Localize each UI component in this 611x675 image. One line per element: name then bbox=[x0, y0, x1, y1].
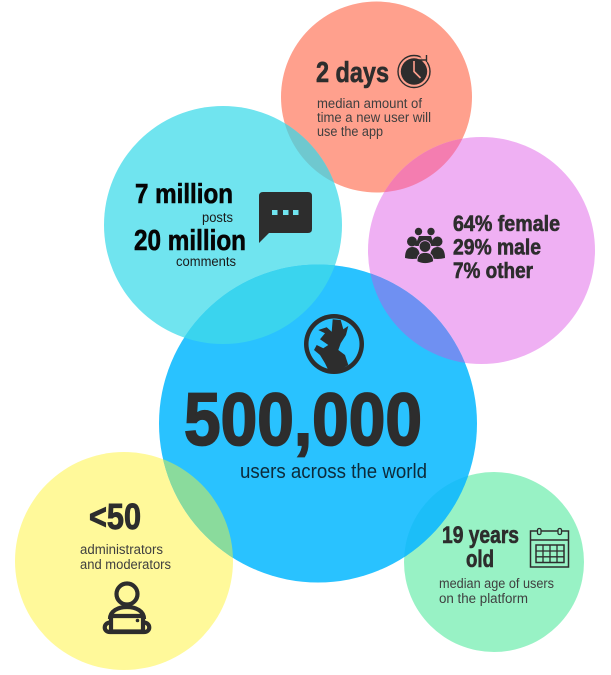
description: median time: median amount of bbox=[317, 96, 422, 111]
circle: yellow staff panel bbox=[15, 452, 233, 670]
label: administrators and moderators: administrators bbox=[80, 542, 163, 557]
label: comments: comments bbox=[176, 254, 236, 269]
stat: under 50: <50 bbox=[89, 496, 141, 537]
circle: pink demographics panel bbox=[368, 137, 595, 364]
text block: median age: median age of users bbox=[439, 576, 554, 591]
heading: 2 days: 2 days bbox=[316, 57, 389, 89]
icon: clock bbox=[398, 55, 430, 88]
overlap: blue and yellow bbox=[163, 459, 233, 558]
description: median time: use the app bbox=[317, 124, 383, 139]
text block: 2 days bbox=[316, 57, 431, 139]
text block: gender split: 64% female bbox=[453, 211, 560, 236]
stat: 20 million: 20 million bbox=[134, 225, 246, 257]
text block: median age: on the platform bbox=[439, 591, 528, 606]
label: posts: posts bbox=[202, 210, 233, 225]
label: administrators and moderators: and moderators bbox=[80, 557, 171, 572]
overlap: red and pink bbox=[384, 138, 462, 192]
text block: median age bbox=[439, 522, 554, 606]
overlap: blue and cyan bbox=[184, 264, 335, 344]
overlap: red and cyan bbox=[284, 123, 334, 182]
description: median time bbox=[317, 96, 431, 139]
icon: globe bbox=[304, 314, 364, 374]
overlap: blue and green bbox=[404, 476, 468, 558]
icon: person at laptop bbox=[105, 584, 149, 632]
overlap: blue and pink bbox=[370, 274, 465, 363]
icon: chat bubble bbox=[259, 192, 312, 243]
text block: gender split: 7% other bbox=[453, 258, 533, 283]
label: administrators and moderators bbox=[80, 542, 171, 572]
stat: 500,000: 500,000 bbox=[184, 378, 422, 461]
icon: calendar bbox=[530, 528, 568, 567]
stat: 7 million: 7 million bbox=[135, 178, 233, 209]
label: users across the world: users across the world bbox=[240, 461, 427, 483]
text block: median age: 19 years bbox=[442, 522, 519, 549]
circle: cyan activity panel bbox=[104, 106, 342, 344]
circle: blue users panel bbox=[159, 264, 477, 582]
text block: posts and comments bbox=[134, 178, 246, 269]
icon: group of people bbox=[405, 228, 445, 264]
description: median time: time a new user will bbox=[317, 110, 431, 125]
text block: gender split bbox=[453, 211, 560, 283]
text block: median age: old bbox=[466, 546, 494, 573]
text block: administrators bbox=[80, 496, 171, 572]
text block: gender split: 29% male bbox=[453, 234, 541, 260]
circle: green age panel bbox=[404, 472, 584, 652]
circle: red time panel bbox=[281, 2, 472, 192]
